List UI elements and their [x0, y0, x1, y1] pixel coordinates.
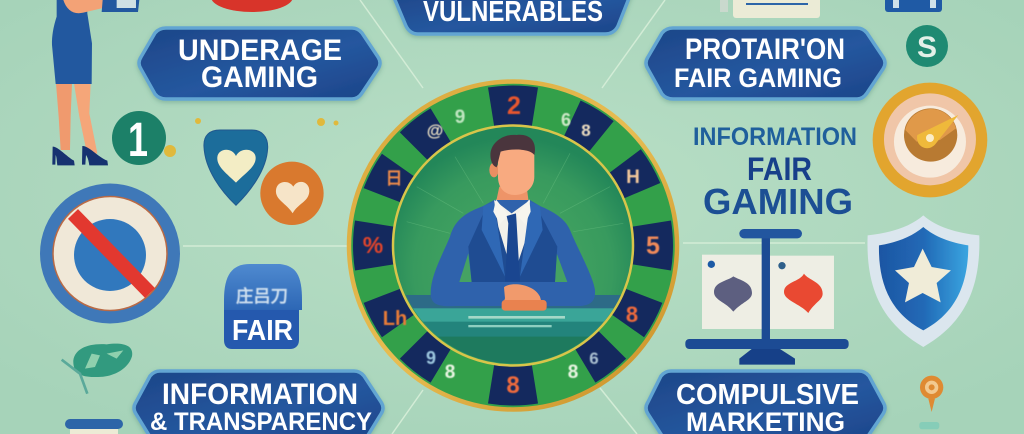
icon: heart pin — [204, 130, 268, 205]
icon: small orange pin — [919, 376, 943, 429]
wheel symbols: 9 — [426, 348, 436, 368]
dress — [52, 0, 92, 84]
icon: red half circle — [211, 0, 293, 12]
wheel symbols: % — [363, 232, 383, 258]
number badge 1 — [112, 111, 166, 167]
icon: blue item at top right — [885, 0, 942, 12]
banner: protairon fair gaming: PROTAIR'ON — [685, 33, 845, 66]
banner: compulsive marketing — [646, 371, 885, 434]
rays — [407, 153, 623, 233]
presenter figure — [406, 134, 624, 364]
wheel symbols — [363, 92, 660, 399]
wheel symbols: 8 — [506, 372, 520, 399]
banner: underage gaming — [139, 28, 380, 99]
hands — [502, 284, 543, 308]
torso — [468, 213, 557, 282]
wheel symbols: 8 — [568, 362, 578, 383]
heading: information fair gaming: INFORMATION — [693, 123, 857, 151]
icon: woman with tablet — [52, 0, 139, 165]
heading: information fair gaming: GAMING — [703, 181, 853, 222]
small yellow dots — [164, 118, 338, 157]
banner: protairon fair gaming — [646, 28, 885, 99]
shoes — [52, 147, 75, 165]
lapels — [482, 202, 505, 277]
number badge 1: 1 — [128, 114, 148, 167]
banner: information and transparency: INFORMATION — [162, 378, 358, 411]
dark segments — [353, 86, 673, 405]
icon: star shield — [867, 215, 979, 347]
tablet — [102, 0, 139, 12]
legs — [56, 83, 72, 150]
banner: vulnerables — [390, 0, 633, 34]
left suit — [714, 276, 752, 312]
wheel symbols: 8 — [581, 121, 591, 140]
connector lines — [183, 0, 865, 434]
face — [498, 147, 534, 195]
suit silhouette — [431, 200, 595, 306]
scale stand — [762, 238, 770, 340]
inner circle — [393, 126, 633, 366]
heading: information fair gaming: FAIR — [747, 151, 812, 187]
icon: prohibition sign — [40, 184, 180, 324]
wheel symbols: @ — [427, 121, 443, 140]
right card — [768, 256, 834, 329]
banner: compulsive marketing: COMPULSIVE — [676, 379, 859, 411]
icon: green blob — [62, 344, 132, 394]
forearms — [435, 282, 503, 304]
icon: document at top right — [720, 0, 820, 18]
icon: cup at bottom left — [65, 419, 123, 434]
wheel symbols: H — [626, 167, 640, 188]
icon: fair badge: 庄吕刀 — [236, 286, 288, 306]
icon: fair badge: FAIR — [232, 315, 293, 347]
wheel symbols: 5 — [646, 232, 660, 260]
table — [413, 308, 614, 324]
icon: scale with cards — [685, 229, 849, 365]
hair — [490, 135, 535, 167]
icon: orange heart circle — [260, 162, 324, 225]
banner: protairon fair gaming: FAIR GAMING — [674, 63, 842, 93]
wheel symbols: 8 — [445, 362, 455, 383]
tie — [505, 213, 520, 282]
neck — [494, 187, 530, 212]
table back band — [406, 295, 621, 309]
icon: gold target — [873, 83, 987, 197]
number badge s — [906, 25, 948, 67]
icon: fair badge — [224, 264, 302, 349]
shirt collar — [493, 199, 531, 224]
banner: information and transparency — [134, 371, 383, 434]
wheel symbols: 6 — [589, 349, 599, 368]
number badge s: S — [917, 31, 937, 64]
wheel symbols: 日 — [386, 169, 402, 188]
right suit — [784, 274, 823, 313]
ear — [489, 163, 499, 177]
gaps between arms and torso — [459, 253, 472, 282]
wheel rim — [349, 82, 677, 410]
left card — [702, 255, 765, 329]
arm — [63, 0, 120, 13]
wheel symbols: Lh — [383, 308, 407, 330]
banner: underage gaming: UNDERAGE — [178, 34, 342, 67]
wheel symbols: 6 — [561, 110, 571, 130]
central wheel — [349, 82, 677, 410]
heading: information fair gaming — [693, 123, 857, 222]
wheel symbols: 9 — [455, 107, 465, 128]
banner: underage gaming: GAMING — [201, 61, 318, 94]
wheel symbols: 8 — [626, 302, 638, 327]
shirt — [494, 200, 530, 277]
wheel symbols: 2 — [507, 92, 521, 120]
